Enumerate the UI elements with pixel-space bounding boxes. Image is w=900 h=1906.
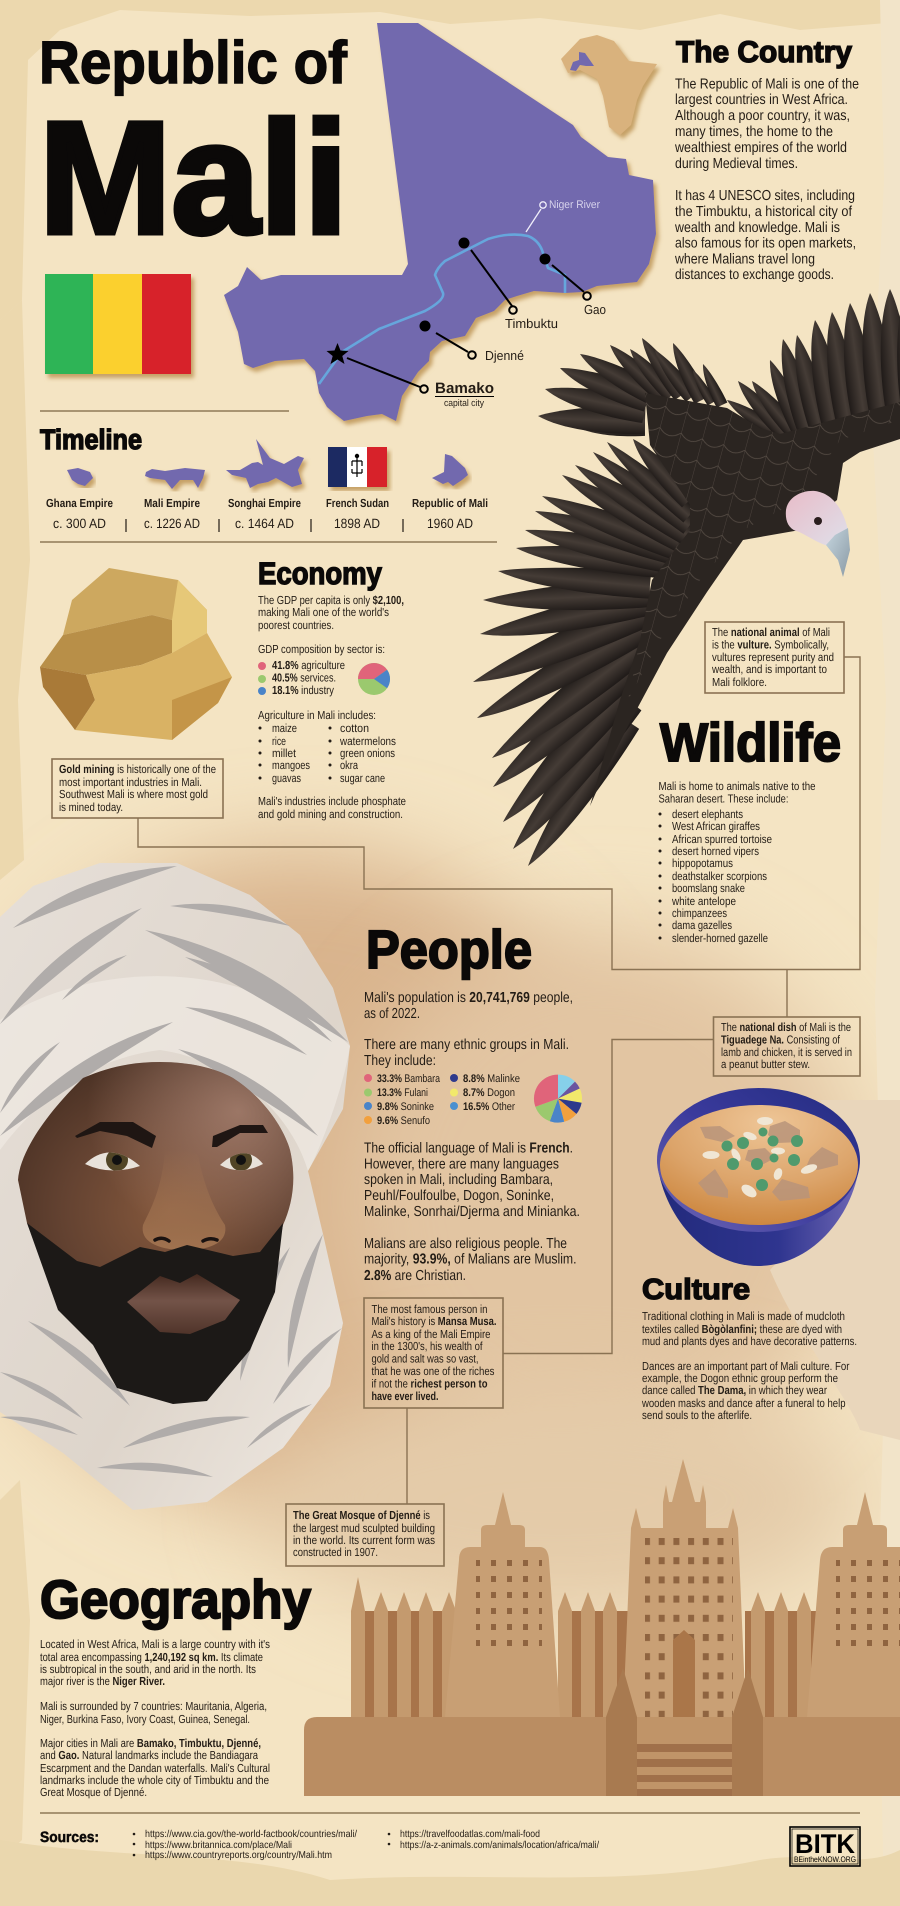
text block: religion <box>364 1236 576 1284</box>
right tower <box>807 1492 900 1717</box>
Gao marker <box>540 254 606 317</box>
text block: GDP composition by sector is: <box>258 643 385 656</box>
Bamako marker: capital city <box>444 398 484 409</box>
logo: BITK <box>790 1827 860 1866</box>
animals list: chimpanzees <box>672 907 727 920</box>
text block: poorest countries. <box>258 619 334 632</box>
labels: French Sudan <box>326 497 389 510</box>
animals list: African spurred tortoise <box>672 833 772 846</box>
labels: c. 1464 AD <box>235 516 294 531</box>
callout: national animal: wealth, and is important to <box>711 663 827 676</box>
heading: The Country <box>676 36 852 69</box>
agriculture list: okra <box>340 759 358 772</box>
soup <box>660 1105 858 1225</box>
animals list: white antelope <box>671 895 736 908</box>
callout: Mansa Musa: that he was one of the riches <box>372 1365 495 1378</box>
Bamako marker: Bamako <box>435 380 494 397</box>
central tower <box>623 1459 746 1717</box>
icon: Ghana Empire <box>67 468 93 486</box>
heading: Sources: <box>40 1829 99 1846</box>
source links: https://www.countryreports.org/country/Mali.htm <box>145 1850 332 1861</box>
pie chart: ethnic groups <box>534 1075 582 1123</box>
text block: mud and plants dyes and have decorative patterns. <box>642 1335 857 1348</box>
callout: national animal: is the vulture. Symbolically, <box>712 638 829 652</box>
heading: Culture <box>642 1274 750 1306</box>
text block: language: spoken in Mali, including Bambara, <box>364 1172 553 1188</box>
text block <box>641 1310 857 1422</box>
text block: industries: and gold mining and construction. <box>258 808 403 821</box>
icon: gold nugget <box>40 568 232 740</box>
sources <box>40 1829 599 1861</box>
text block: major river is the Niger River. <box>40 1675 165 1688</box>
agriculture list: maize <box>272 722 297 735</box>
animals list: deathstalker scorpions <box>672 870 767 883</box>
agriculture list: cotton <box>340 722 369 735</box>
text block <box>658 780 816 806</box>
callout: gold mining: Gold mining is historically one of the <box>59 763 216 776</box>
callout: Great Mosque: constructed in 1907. <box>293 1546 378 1559</box>
text block: Mali is home to animals native to the <box>658 780 816 793</box>
face <box>18 1062 293 1310</box>
callout: national dish <box>714 1017 860 1076</box>
heading: Mali: Mali <box>39 88 348 267</box>
lips <box>127 1274 240 1334</box>
panel: timeline <box>40 424 488 532</box>
wing feathers <box>467 284 900 875</box>
pie chart: GDP <box>358 663 390 695</box>
text block: the Timbuktu, a historical city of <box>675 204 853 220</box>
chart legend: 41.8% agriculture <box>272 659 345 672</box>
text block <box>40 1638 270 1799</box>
panel: culture <box>641 1274 857 1422</box>
text block: industries: Mali's industries include phosphate <box>258 795 406 808</box>
animals list: boomslang snake <box>672 882 745 895</box>
panel: economy <box>40 556 406 821</box>
callout: Mansa Musa: As a king of the Mali Empire <box>372 1328 490 1341</box>
Niger River label: Niger River <box>549 199 600 211</box>
logo: BITK: BITK <box>795 1829 855 1859</box>
back walls <box>353 1611 820 1717</box>
text block: It has 4 UNESCO sites, including <box>675 188 855 204</box>
Timbuktu marker <box>458 238 558 331</box>
text block: textiles called Bògòlanfini; these are dyed with <box>642 1323 842 1336</box>
Djenne marker <box>420 320 524 363</box>
text block: Niger, Burkina Faso, Ivory Coast, Guinea, Senegal. <box>40 1713 250 1726</box>
Gao marker: Gao <box>584 302 606 317</box>
labels <box>46 497 488 532</box>
text block: also famous for its open markets, <box>675 236 856 252</box>
text block: making Mali one of the world's <box>258 606 389 619</box>
illustration: bowl of stew <box>657 1088 860 1266</box>
text block: and Gao. Natural landmarks include the Bandiagara <box>40 1749 258 1762</box>
text block: industries <box>258 795 406 821</box>
chart legend: 16.5% Other <box>463 1101 515 1113</box>
text block <box>674 76 859 283</box>
icon: Republic of Mali <box>432 454 468 486</box>
agriculture list: green onions <box>340 747 395 760</box>
text block: Traditional clothing in Mali is made of mudcloth <box>642 1310 845 1323</box>
callout: Mansa Musa: The most famous person in <box>372 1303 488 1316</box>
text block: during Medieval times. <box>675 156 798 172</box>
heading: Geography <box>40 1570 311 1630</box>
labels: 1898 AD <box>334 516 380 531</box>
callout: national dish: lamb and chicken, it is served in <box>721 1046 852 1059</box>
text block: Located in West Africa, Mali is a large country with it's <box>40 1638 270 1651</box>
vulture head <box>786 491 850 577</box>
labels: Songhai Empire <box>228 497 301 510</box>
platform <box>304 1717 900 1796</box>
agriculture list: rice <box>272 735 286 748</box>
panel: geography <box>40 1570 311 1799</box>
text block: largest countries in West Africa. <box>675 92 848 108</box>
callout: Mansa Musa: have ever lived. <box>372 1390 438 1403</box>
callout: Great Mosque: the largest mud sculpted building <box>293 1522 435 1535</box>
text block: wooden masks and dance after a funeral to help <box>641 1397 846 1410</box>
beak <box>826 528 850 577</box>
callout: national animal: vultures represent purity and <box>712 651 834 664</box>
text block: religion: majority, 93.9%, of Malians are Muslim. <box>364 1252 576 1268</box>
panel: people <box>364 920 582 1284</box>
left tower <box>445 1492 560 1717</box>
turban <box>0 863 350 1510</box>
callout: gold mining <box>52 759 223 818</box>
flag of Mali <box>45 274 191 374</box>
text block: as of 2022. <box>364 1006 420 1022</box>
callout: national animal <box>705 622 844 693</box>
text block: distances to exchange goods. <box>675 267 834 283</box>
text block: where Malians travel long <box>674 252 815 268</box>
peas <box>722 1128 803 1191</box>
nose <box>143 1150 225 1250</box>
chart legend <box>364 1073 520 1127</box>
text block: They include: <box>364 1053 436 1069</box>
text block: is subtropical in the south, and arid in the north. Its <box>40 1663 256 1676</box>
animals list: slender-horned gazelle <box>672 932 768 945</box>
text block: Major cities in Mali are Bamako, Timbuktu, Djenné, <box>40 1737 261 1750</box>
callout: national dish: a peanut butter stew. <box>721 1058 810 1071</box>
callout: Great Mosque: The Great Mosque of Djenné is <box>293 1509 430 1522</box>
text block: Mali is surrounded by 7 countries: Mauritania, Algeria, <box>40 1700 267 1713</box>
text block: wealthiest empires of the world <box>674 140 847 156</box>
text block: many times, the home to the <box>675 124 833 140</box>
icon: Songhai Empire <box>226 439 304 488</box>
text block: Saharan desert. These include: <box>658 792 788 806</box>
panel: the country <box>674 36 859 283</box>
central door <box>673 1630 695 1717</box>
callout: gold mining: is mined today. <box>59 801 123 814</box>
text block: The Republic of Mali is one of the <box>675 76 859 92</box>
callout: Great Mosque: in the world. Its current form was <box>293 1534 435 1547</box>
beard <box>27 1223 283 1404</box>
text block: landmarks include the whole city of Timbuktu and the <box>40 1774 269 1787</box>
heading: Timeline <box>40 424 142 455</box>
bowl <box>657 1160 860 1266</box>
text block: religion: 2.8% are Christian. <box>364 1268 466 1284</box>
illustration: Great Mosque of Djenne <box>304 1459 900 1796</box>
heading: Economy <box>258 556 383 591</box>
labels: 1960 AD <box>427 516 473 531</box>
chart legend: 8.8% Malinke <box>463 1073 520 1085</box>
text block: There are many ethnic groups in Mali. <box>364 1037 569 1053</box>
icon: Africa locator map <box>561 35 657 135</box>
vulture <box>467 284 900 875</box>
agriculture list: millet <box>272 747 297 760</box>
callout: Great Mosque <box>286 1504 444 1566</box>
Niger River <box>319 235 565 384</box>
text block: religion: Malians are also religious people. The <box>364 1236 567 1252</box>
Bamako marker <box>326 343 494 409</box>
chart legend: 33.3% Bambara <box>377 1073 441 1085</box>
callout: Mansa Musa: if not the richest person to <box>372 1378 488 1390</box>
heading: Wildlife <box>660 713 841 773</box>
text block: language: Malinke, Sonrhai/Djerma and Minianka. <box>364 1204 580 1220</box>
meat <box>698 1121 838 1201</box>
turban stripes <box>0 853 357 1477</box>
source links: https://www.cia.gov/the-world-factbook/countries/mali/ <box>145 1829 357 1840</box>
chart legend: 13.3% Fulani <box>377 1087 428 1099</box>
text block: dance called The Dama, in which they wear <box>642 1384 827 1397</box>
labels: Ghana Empire <box>46 497 113 510</box>
text block: language <box>364 1140 580 1220</box>
chart legend: 18.1% industry <box>272 684 334 697</box>
labels: c. 300 AD <box>53 516 106 531</box>
country outline <box>224 23 656 421</box>
panel: wildlife <box>658 713 841 945</box>
labels: Republic of Mali <box>412 497 488 510</box>
text block: send souls to the afterlife. <box>642 1409 752 1422</box>
heading: People <box>366 920 532 980</box>
callout: national dish: Tiguadege Na. Consisting of <box>721 1034 841 1046</box>
chart legend <box>258 659 345 697</box>
callout: Mansa Musa: gold and salt was so vast, <box>372 1352 478 1366</box>
callout: Mansa Musa: in the 1300's, his wealth of <box>372 1340 483 1353</box>
callout: national animal: The national animal of Mali <box>712 626 830 639</box>
text block: language: Peuhl/Foulfoulbe, Dogon, Soninke, <box>364 1188 554 1204</box>
map of Mali <box>224 23 656 421</box>
text block: language: The official language of Mali is French. <box>364 1140 573 1156</box>
icon: French Sudan flag <box>328 447 387 487</box>
agriculture list: watermelons <box>339 735 396 748</box>
agriculture list <box>258 709 396 785</box>
pilasters <box>351 1577 811 1717</box>
text block: Mali's population is 20,741,769 people, <box>364 990 573 1006</box>
callout: gold mining: most important industries in Mali. <box>59 776 202 789</box>
chart legend: 8.7% Dogon <box>463 1087 515 1099</box>
logo: BITK: BEintheKNOW.ORG <box>794 1855 856 1864</box>
text block: The GDP per capita is only $2,100, <box>258 594 404 607</box>
animals list: hippopotamus <box>672 857 733 870</box>
animals list: desert elephants <box>672 808 743 821</box>
text block: total area encompassing 1,240,192 sq km. Its climate <box>40 1651 263 1664</box>
heading: Republic of: Republic of <box>39 29 348 96</box>
labels: c. 1226 AD <box>144 516 200 531</box>
agriculture list: sugar cane <box>340 772 385 785</box>
animals list: desert horned vipers <box>672 845 759 858</box>
source links <box>134 1829 599 1861</box>
text block: wealth and knowledge. Mali is <box>674 220 840 236</box>
text block: Great Mosque of Djenné. <box>40 1786 147 1799</box>
title <box>39 29 348 267</box>
source links: https://www.britannica.com/place/Mali <box>145 1840 292 1851</box>
chart legend: 9.8% Soninke <box>377 1101 434 1113</box>
labels: Mali Empire <box>144 497 200 510</box>
agriculture list: guavas <box>272 772 301 785</box>
callout: national dish: The national dish of Mali is the <box>721 1021 851 1034</box>
callout: gold mining: Southwest Mali is where most gold <box>59 788 208 801</box>
text block <box>258 594 404 656</box>
text block: Escarpment and the Dandan waterfalls. Mali's Cultural <box>40 1762 270 1775</box>
text block: Dances are an important part of Mali culture. For <box>642 1360 850 1373</box>
callout: Mansa Musa: Mali's history is Mansa Musa. <box>372 1315 496 1328</box>
text block: example, the Dogon ethnic group perform the <box>642 1372 838 1385</box>
Timbuktu marker: Timbuktu <box>505 316 558 331</box>
animals list: West African giraffes <box>672 820 760 833</box>
agriculture list: mangoes <box>272 759 310 772</box>
text block: Although a poor country, it was, <box>675 108 850 124</box>
agriculture list: Agriculture in Mali includes: <box>258 709 376 722</box>
chart legend: 9.6% Senufo <box>377 1115 430 1127</box>
central stairs <box>606 1668 763 1796</box>
eyebrows <box>75 1122 156 1148</box>
body and wing coverts <box>590 393 900 806</box>
text block: language: However, there are many languages <box>364 1156 559 1172</box>
chart legend: 40.5% services. <box>272 672 336 684</box>
Niger River label <box>526 199 600 232</box>
icon: Mali Empire <box>145 468 205 489</box>
callout: Mansa Musa <box>364 1298 503 1408</box>
callout: national animal: Mali folklore. <box>712 676 767 689</box>
eyes <box>85 1152 263 1170</box>
turban fold <box>0 976 350 1171</box>
text block <box>364 990 573 1069</box>
animals list <box>660 808 772 945</box>
rice grains <box>702 1117 818 1200</box>
source links: https://a-z-animals.com/animals/location/africa/mali/ <box>400 1840 599 1851</box>
source links: https://travelfoodatlas.com/mali-food <box>400 1829 540 1840</box>
animals list: dama gazelles <box>672 919 732 932</box>
illustration: man in turban <box>0 853 357 1510</box>
Djenne marker: Djenné <box>485 348 524 363</box>
